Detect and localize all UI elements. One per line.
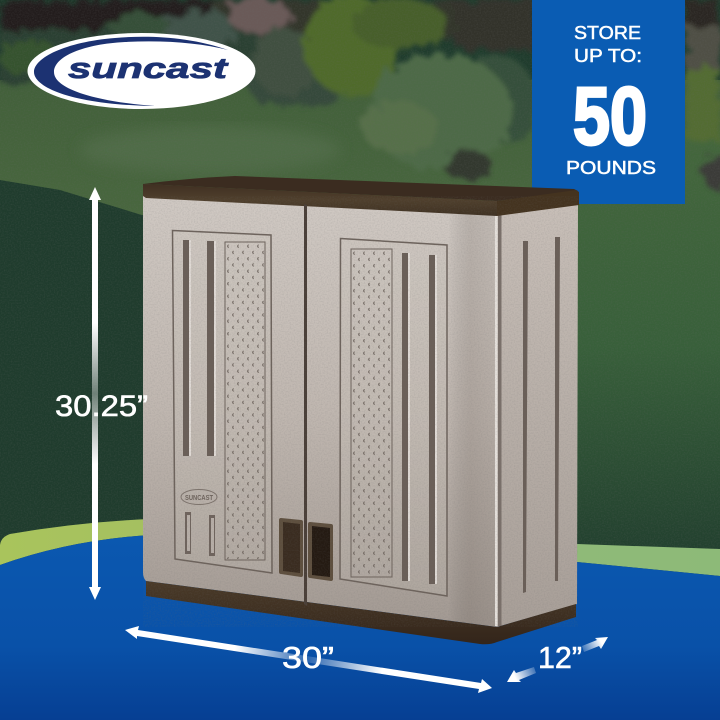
- background grain: [0, 0, 720, 560]
- depth label: 12”: [538, 640, 582, 675]
- callout line two: UP TO:: [574, 45, 642, 66]
- depth arrow upper: [582, 637, 608, 652]
- height label: 30.25”: [55, 390, 148, 423]
- callout panel: [532, 0, 685, 204]
- lawn shadow left: [0, 180, 145, 560]
- logo wordmark: suncast: [68, 53, 229, 85]
- left dimples: [226, 243, 265, 559]
- left door slots: [183, 240, 216, 556]
- upper lawn: [0, 80, 720, 215]
- blue floor: [0, 535, 720, 720]
- door handles: [279, 518, 333, 581]
- door gap: [304, 204, 307, 606]
- right door dimple panel: [351, 249, 392, 577]
- cabinet front: [143, 196, 497, 627]
- right door panel outline: [340, 238, 447, 596]
- rounded corner shading: [448, 212, 498, 626]
- cabinet base: [146, 581, 576, 644]
- corner seam: [495, 214, 502, 626]
- lid front lip: [143, 184, 497, 216]
- embossed brand badge: [181, 490, 217, 504]
- curved floor band: [0, 519, 720, 576]
- callout: store up to 50 pounds: [532, 0, 685, 204]
- callout unit: POUNDS: [566, 157, 656, 178]
- lawn right of cabinet: [576, 130, 720, 560]
- embossed brand badge: SUNCAST: [185, 495, 214, 502]
- left door dimple panel: [225, 242, 265, 560]
- height arrow: [89, 187, 101, 600]
- width label: 30”: [282, 640, 334, 675]
- logo: Suncast: [28, 33, 256, 109]
- cabinet texture: [143, 196, 578, 627]
- side panel grooves: [523, 237, 560, 593]
- right door slots: [402, 253, 437, 584]
- cabinet: [143, 176, 579, 644]
- lighter lawn patch: [80, 126, 340, 174]
- left door panel outline: [172, 230, 272, 573]
- logo oval: [28, 33, 256, 109]
- lid top surface: [143, 176, 578, 201]
- callout line one: STORE: [574, 22, 641, 43]
- right dimples: [352, 250, 392, 576]
- depth arrow lower: [507, 667, 536, 682]
- depth arrows: [507, 637, 608, 682]
- foliage: [0, 0, 720, 190]
- width arrow: [125, 626, 492, 693]
- logo swoosh: [34, 37, 228, 106]
- callout number: 50: [573, 71, 647, 162]
- lid side lip: [497, 190, 579, 216]
- cabinet side: [497, 203, 578, 627]
